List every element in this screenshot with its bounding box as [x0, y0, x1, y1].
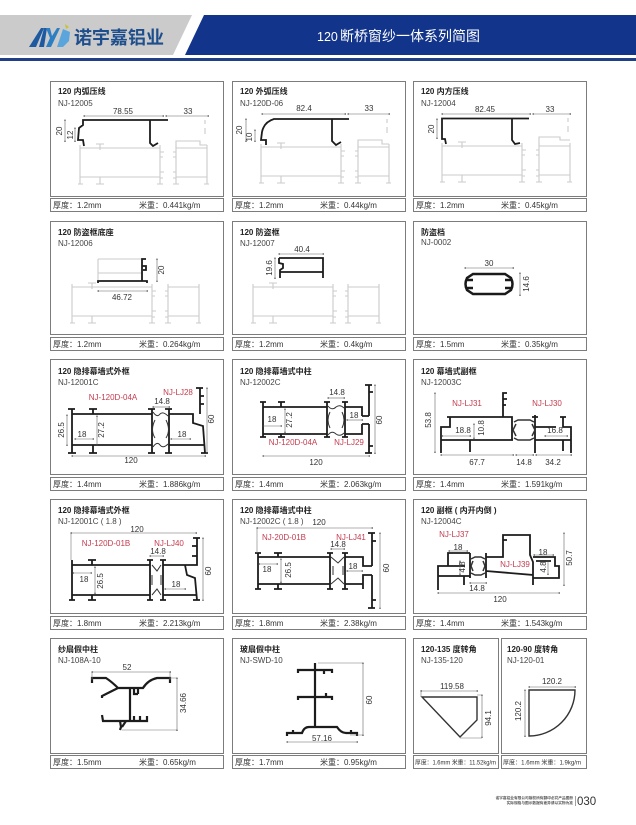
dimensions: 14.8 [329, 388, 345, 397]
dimensions: 120 [493, 595, 507, 604]
panel: 纱扇假中柱 [50, 638, 224, 768]
dimensions: 18 [80, 575, 89, 584]
dimensions: 67.7 [469, 458, 485, 467]
red part labels [269, 438, 364, 447]
part number: NJ-12002C ( 1.8 ) [240, 517, 304, 526]
part number: NJ-12004C [421, 517, 462, 526]
dimensions: 10 [245, 132, 254, 141]
dimensions: 119.58 [440, 682, 464, 691]
page footer [496, 795, 596, 808]
imprint text: 诺宇嘉铝业有限公司版权所有翻印必究产品图册 [496, 795, 573, 800]
dimensions [465, 259, 531, 295]
spec strip [232, 616, 406, 630]
dimensions [98, 259, 166, 302]
spec strip: 厚度：1.2mm [235, 339, 284, 349]
dimensions: 60 [382, 563, 391, 572]
red part labels [89, 388, 193, 402]
panel: 120 隐排幕墙式中柱 1.8 [232, 500, 406, 630]
dimensions [424, 393, 571, 467]
dimensions: 14.6 [522, 276, 531, 292]
spec strip: 厚度：1.2mm [53, 200, 102, 210]
dimensions [265, 245, 323, 278]
dimensions: 60 [204, 566, 213, 575]
profile [529, 690, 575, 736]
heading: 120 隐排幕墙式外框 [58, 505, 130, 515]
header band [0, 15, 636, 61]
panel: 120 防盗框 [232, 222, 406, 350]
dimensions: 14.8 [330, 540, 346, 549]
spec strip: 厚度：1.6mm 米重：1.9kg/m [503, 758, 581, 766]
spec strip: 厚度：1.5mm [416, 339, 465, 349]
part number: NJ-12002C [240, 378, 281, 387]
dimensions: 4.8 [539, 561, 548, 573]
spec strip: 米重：0.35kg/m [501, 339, 558, 349]
panel: 120 防盗框底座 [50, 222, 224, 350]
spec strip [50, 756, 224, 768]
dimensions: 27.2 [97, 422, 106, 438]
red part labels: NJ-LJ28 [163, 388, 193, 397]
dimensions: 40.4 [294, 245, 310, 254]
grey window frame [251, 283, 381, 323]
dimensions: 10.8 [477, 420, 486, 436]
profile [442, 118, 529, 144]
spec strip: 厚度：1.4mm [53, 479, 102, 489]
spec strip: 厚度：1.4mm [416, 618, 465, 628]
thermal break [152, 412, 168, 447]
red part labels: NJ-120D-01B [82, 539, 130, 548]
part number: NJ-135-120 [421, 656, 463, 665]
dimensions [263, 385, 384, 467]
dimensions: 18 [172, 580, 181, 589]
part number: NJ-12004 [421, 99, 456, 108]
heading: 120 内弧压线 [58, 86, 106, 96]
dimensions: 82.4 [296, 104, 312, 113]
dimensions: 20 [427, 124, 436, 133]
dimensions [57, 388, 216, 465]
dimensions [71, 525, 213, 600]
heading: 120 副框 ( 内开内倒 ) [421, 505, 497, 515]
dimensions [235, 104, 389, 141]
heading: 120 外弧压线 [240, 86, 288, 96]
dimensions: 14.8 [150, 547, 166, 556]
spec strip [414, 478, 586, 490]
panel: 120 内弧压线 [50, 82, 224, 212]
dimensions: 34.66 [179, 692, 188, 713]
spec strip: 米重：2.213kg/m [139, 618, 201, 628]
grey window frame [70, 259, 201, 323]
spec strip: 米重：2.063kg/m [320, 479, 382, 489]
profile [441, 393, 571, 453]
red part labels: NJ-LJ40 [154, 539, 184, 548]
spec strip [414, 338, 586, 350]
logo mark [29, 24, 70, 47]
part number: NJ-108A-10 [58, 656, 101, 665]
spec strip: 米重：0.45kg/m [501, 200, 558, 210]
dimensions: 120.2 [542, 677, 563, 686]
red part labels: NJ-20D-01B [262, 533, 306, 542]
red part labels [439, 530, 530, 569]
dimensions: 20 [157, 265, 166, 274]
grey window frame [440, 118, 572, 182]
red part labels: NJ-LJ31 [452, 399, 482, 408]
dimensions: 26.5 [96, 573, 105, 589]
profile [466, 274, 512, 294]
panel: 120 副框（内开内倒） [414, 500, 586, 630]
dimensions: 18 [268, 415, 277, 424]
heading: 120 幕墙式副框 [421, 366, 477, 376]
header rule [0, 58, 636, 61]
dimensions: 26.5 [284, 562, 293, 578]
red part labels [262, 533, 366, 542]
part number: NJ-12007 [240, 239, 275, 248]
dimensions: 27.2 [285, 412, 294, 428]
dimensions: 14.8 [516, 458, 532, 467]
spec strip: 厚度：1.8mm [53, 618, 102, 628]
profile [78, 120, 168, 146]
spec strip [50, 478, 224, 490]
heading: 120 隐排幕墙式外框 [58, 366, 130, 376]
page title: 断桥窗纱一体系列简图 [340, 28, 480, 44]
dimensions: 33 [365, 104, 374, 113]
panel: 玻扇假中柱 [232, 638, 406, 768]
spec strip [232, 756, 406, 768]
dimensions: 53.8 [424, 412, 433, 428]
part number: NJ-0002 [421, 238, 452, 247]
dimensions: 120 [312, 518, 326, 527]
page title: 120 [317, 30, 338, 44]
profile [287, 663, 357, 736]
spec strip: 厚度：1.2mm [235, 200, 284, 210]
dimensions: 60 [365, 695, 374, 704]
profile [68, 388, 208, 453]
dimensions: 60 [375, 415, 384, 424]
dimensions: 34.2 [545, 458, 561, 467]
dimensions: 78.55 [113, 107, 134, 116]
dimensions [257, 518, 391, 608]
panel: 120-90 度转角 [502, 638, 586, 768]
spec strip: 厚度：1.6mm 米重：11.52kg/m [415, 758, 496, 766]
heading: 防盗档 [421, 227, 445, 237]
spec strip: 厚度：1.7mm [235, 757, 284, 767]
spec strip: 米重：1.886kg/m [139, 479, 201, 489]
part number: NJ-12003C [421, 378, 462, 387]
dimensions: 52 [123, 663, 132, 672]
page number: 030 [577, 796, 596, 808]
red part labels [82, 539, 184, 548]
title band [185, 15, 636, 55]
dimensions: 120.2 [514, 700, 523, 721]
dimensions: 18 [539, 548, 548, 557]
thermal break [328, 406, 344, 435]
panel: 防盗档 [414, 222, 586, 350]
dimensions: 120 [130, 525, 144, 534]
dimensions [514, 677, 575, 736]
panel: 120-135 度转角 [414, 638, 498, 768]
heading: 120 隐排幕墙式中柱 [240, 505, 312, 515]
red part labels: NJ-LJ41 [336, 533, 366, 542]
spec strip [414, 198, 586, 212]
profile [422, 697, 477, 737]
spec strip [50, 198, 224, 212]
spec strip [232, 478, 406, 490]
profile [98, 259, 147, 283]
panel: 120 内方压线 [414, 82, 586, 212]
spec strip: 米重：0.4kg/m [320, 339, 373, 349]
spec strip: 米重：0.44kg/m [320, 200, 377, 210]
panel: 120 幕墙式副框 [414, 360, 586, 490]
dimensions: 14.8 [154, 397, 170, 406]
part number: NJ-12006 [58, 239, 93, 248]
heading: 120 防盗框 [240, 227, 280, 237]
imprint text second line: 实际规格与图示数据有差异请以实物为准 [507, 800, 573, 805]
dimensions: 82.45 [475, 105, 496, 114]
thermal break [152, 565, 161, 595]
spec strip: 米重：1.591kg/m [501, 479, 563, 489]
dimensions: 94.1 [484, 710, 493, 726]
dimensions: 4.8 [458, 561, 467, 573]
dimensions: 33 [184, 107, 193, 116]
heading: 纱扇假中柱 [58, 644, 98, 654]
heading: 120 防盗框底座 [58, 227, 114, 237]
panel: 120 隐排幕墙式中柱 [232, 360, 406, 490]
red part labels: NJ-LJ30 [532, 399, 562, 408]
red part labels: NJ-LJ39 [500, 560, 530, 569]
dimensions: 18.8 [455, 426, 471, 435]
spec strip: 厚度：1.2mm [53, 339, 102, 349]
heading: 120-135 度转角 [421, 644, 477, 654]
dimensions: 57.16 [312, 734, 333, 743]
dimensions: 20 [235, 125, 244, 134]
dimensions: 14.8 [469, 584, 485, 593]
spec strip: 厚度：1.8mm [235, 618, 284, 628]
red part labels: NJ-LJ37 [439, 530, 469, 539]
profile [69, 538, 200, 600]
dimensions: 18 [454, 543, 463, 552]
dimensions: 30 [485, 259, 494, 268]
profile [260, 385, 373, 453]
spec strip: 米重：0.65kg/m [139, 757, 196, 767]
profile [92, 678, 170, 730]
red part labels: NJ-120D-04A [269, 438, 318, 447]
dimensions: 26.5 [57, 422, 66, 438]
spec strip: 米重：1.543kg/m [501, 618, 563, 628]
panel: 120 隐排幕墙式外框 [50, 360, 224, 490]
part number: NJ-12001C ( 1.8 ) [58, 517, 122, 526]
dimensions [421, 682, 493, 738]
profile [255, 533, 376, 608]
spec strip: 米重：0.95kg/m [320, 757, 377, 767]
dimensions: 16.8 [547, 426, 563, 435]
dimensions [438, 533, 574, 604]
red part labels: NJ-120D-04A [89, 393, 138, 402]
dimensions [427, 105, 570, 138]
grey window frame [259, 119, 391, 183]
dimensions [287, 663, 374, 743]
spec strip: 厚度：1.2mm [416, 200, 465, 210]
dimensions: 18 [349, 562, 358, 571]
dimensions: 18 [78, 430, 87, 439]
spec strip [232, 338, 406, 350]
dimensions: 18 [350, 411, 359, 420]
dimensions: 20 [55, 126, 64, 135]
spec strip [232, 198, 406, 212]
spec strip [50, 338, 224, 350]
profile [261, 119, 349, 145]
panel: 120 外弧压线 [232, 82, 406, 212]
part number: NJ-120D-06 [240, 99, 284, 108]
spec strip: 厚度：1.4mm [235, 479, 284, 489]
spec strip: 厚度：1.4mm [416, 479, 465, 489]
heading: 玻扇假中柱 [240, 644, 280, 654]
spec strip: 米重：0.264kg/m [139, 339, 201, 349]
profile [438, 535, 559, 590]
divider [574, 796, 577, 806]
red part labels: NJ-LJ29 [334, 438, 364, 447]
dimensions: 50.7 [565, 550, 574, 566]
dimensions: 60 [207, 414, 216, 423]
dimensions: 18 [178, 430, 187, 439]
heading: 120 隐排幕墙式中柱 [240, 366, 312, 376]
thermal break [471, 557, 485, 575]
heading: 120-90 度转角 [507, 644, 558, 654]
dimensions: 19.6 [265, 260, 274, 276]
spec strip [50, 616, 224, 630]
brand name: 诺宇嘉铝业 [74, 28, 164, 48]
dimensions: 120 [309, 458, 323, 467]
thermal break [331, 557, 344, 584]
part number: NJ-120-01 [507, 656, 545, 665]
dimensions [92, 663, 188, 730]
panel: 120 隐排幕墙式外框 1.8 [50, 500, 224, 630]
part number: NJ-12001C [58, 378, 99, 387]
spec strip [414, 616, 586, 630]
dimensions: 120 [124, 456, 138, 465]
profile [279, 258, 323, 278]
dimensions [55, 107, 208, 141]
dimensions: 46.72 [112, 293, 133, 302]
thermal break [513, 420, 535, 440]
part number: NJ-12005 [58, 99, 93, 108]
dimensions: 18 [263, 565, 272, 574]
dimensions: 12 [66, 130, 75, 139]
logo panel [0, 15, 192, 55]
part number: NJ-SWD-10 [240, 656, 283, 665]
red part labels [452, 399, 562, 408]
spec strip: 米重：2.38kg/m [320, 618, 377, 628]
grey window frame [78, 120, 209, 184]
heading: 120 内方压线 [421, 86, 469, 96]
dimensions: 33 [546, 105, 555, 114]
spec strip: 厚度：1.5mm [53, 757, 102, 767]
spec strip: 米重：0.441kg/m [139, 200, 201, 210]
